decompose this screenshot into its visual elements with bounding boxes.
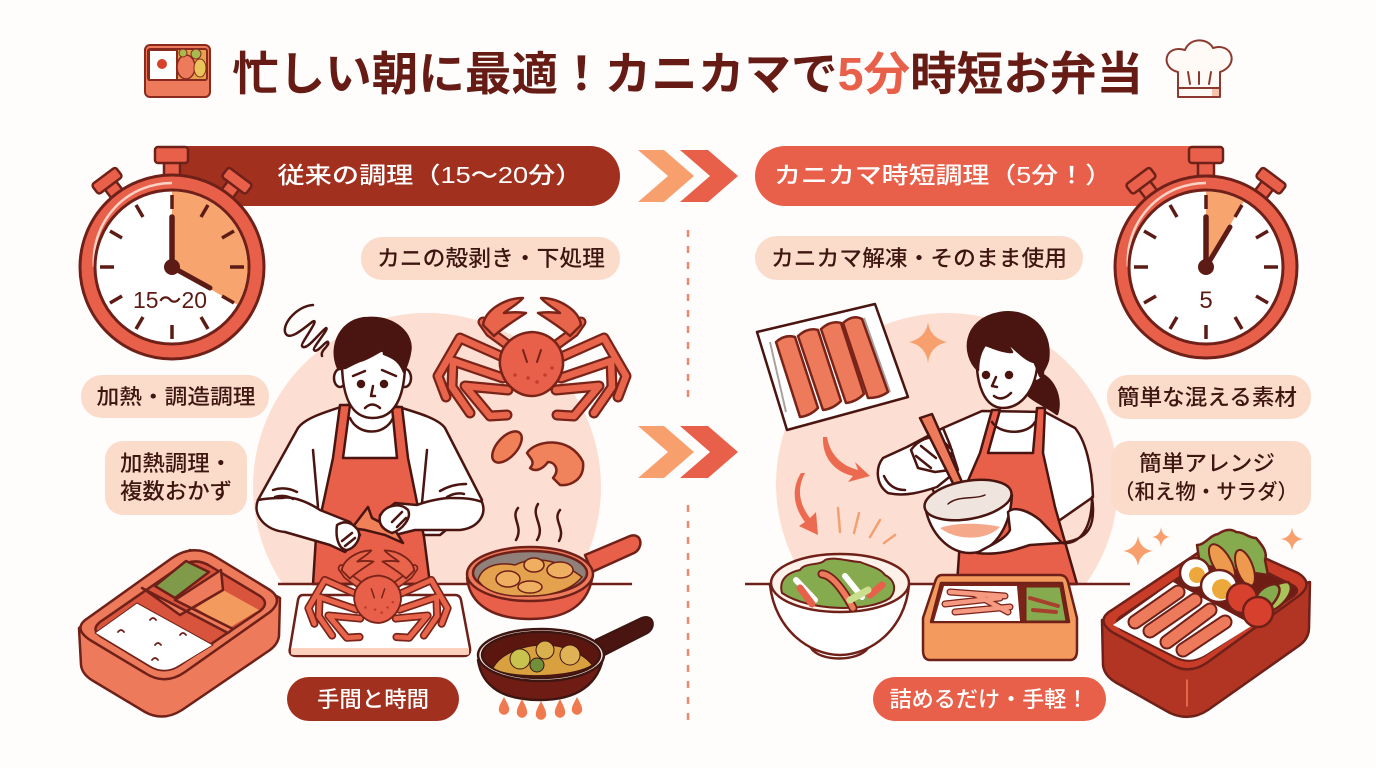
label: multiple dishes: 加熱調理・ xyxy=(120,451,232,476)
title: 忙しい朝に最適！カニカマで5分時短お弁当 xyxy=(232,48,1143,100)
icon: crab on cutting board xyxy=(290,550,470,656)
label: easy arrange: 簡単アレンジ xyxy=(1139,451,1275,476)
stopwatch: 15-20 minutes xyxy=(80,147,264,359)
label: heating: 加熱・調造調理 xyxy=(96,386,256,409)
man arms xyxy=(257,498,360,552)
background circle: traditional xyxy=(253,313,601,584)
counter line left xyxy=(278,583,632,585)
label: just pack: 詰めるだけ・手軽！ xyxy=(890,687,1088,712)
woman bowl xyxy=(921,474,1015,553)
label: crab shelling xyxy=(361,237,620,280)
icon: crab top xyxy=(438,298,626,416)
woman left arm xyxy=(878,428,958,494)
woman apron xyxy=(957,408,1077,584)
label: easy arrange xyxy=(1111,441,1311,515)
woman right hand xyxy=(977,497,1093,554)
arrow: curved down xyxy=(795,473,818,535)
label: easy mix: 簡単な混える素材 xyxy=(1117,385,1297,410)
icon: dizzy swirl xyxy=(285,305,328,356)
person: stressed man xyxy=(257,318,483,584)
divider xyxy=(687,230,689,722)
arrow: top chevrons xyxy=(638,150,738,202)
icon: bento box xyxy=(145,45,210,97)
icon: chef hat xyxy=(1167,40,1232,97)
label: just pack xyxy=(873,677,1106,721)
background circle: quick xyxy=(776,313,1118,584)
icon: small bento xyxy=(923,575,1077,660)
label: effort and time: 手間と時間 xyxy=(317,687,429,712)
icon: kanikama pack xyxy=(757,304,908,430)
banner: traditional cooking xyxy=(172,146,620,206)
person: smiling woman xyxy=(878,312,1093,584)
stopwatch: 15-20 minutes: 15〜20 xyxy=(133,287,207,313)
woman ponytail xyxy=(1028,372,1059,414)
icon: finished bento right xyxy=(1102,530,1310,717)
label: multiple dishes xyxy=(105,441,247,515)
label: easy arrange: （和え物・サラダ） xyxy=(1114,481,1298,504)
banner: kanikama quick cooking: カニカマ時短調理（5分！） xyxy=(774,162,1112,188)
icon: salad bowl xyxy=(770,554,909,658)
label: thaw and use xyxy=(755,236,1083,280)
man torso xyxy=(258,405,482,535)
man apron xyxy=(313,405,430,584)
counter line right xyxy=(745,583,1130,585)
label: heating xyxy=(81,375,269,418)
stopwatch: 5 minutes: 5 xyxy=(1199,287,1213,314)
arrow: middle chevrons xyxy=(638,426,738,478)
icon: steam xyxy=(515,504,561,541)
label: crab shelling: カニの殻剥き・下処理 xyxy=(377,246,605,271)
stopwatch: 5 minutes xyxy=(1115,147,1297,358)
icon: motion ticks xyxy=(838,508,895,543)
man head xyxy=(334,318,411,418)
arrow: curved down right xyxy=(823,437,870,482)
label: multiple dishes: 複数おかず xyxy=(120,479,232,504)
icon: sparkles right xyxy=(1123,527,1304,566)
label: easy mix xyxy=(1107,375,1311,419)
label: thaw and use: カニカマ解凍・そのまま使用 xyxy=(771,246,1067,271)
icon: frying pan with food xyxy=(467,535,640,619)
icon: crab pieces xyxy=(487,426,583,485)
woman torso xyxy=(925,411,1093,520)
banner: traditional cooking: 従来の調理（15〜20分） xyxy=(278,162,582,188)
label: effort and time xyxy=(287,677,459,721)
icon: sparkle xyxy=(909,322,947,363)
icon: pan on flame xyxy=(478,617,653,720)
woman head xyxy=(968,312,1048,408)
banner: kanikama quick cooking xyxy=(755,146,1205,206)
icon: open bento left xyxy=(79,550,280,717)
